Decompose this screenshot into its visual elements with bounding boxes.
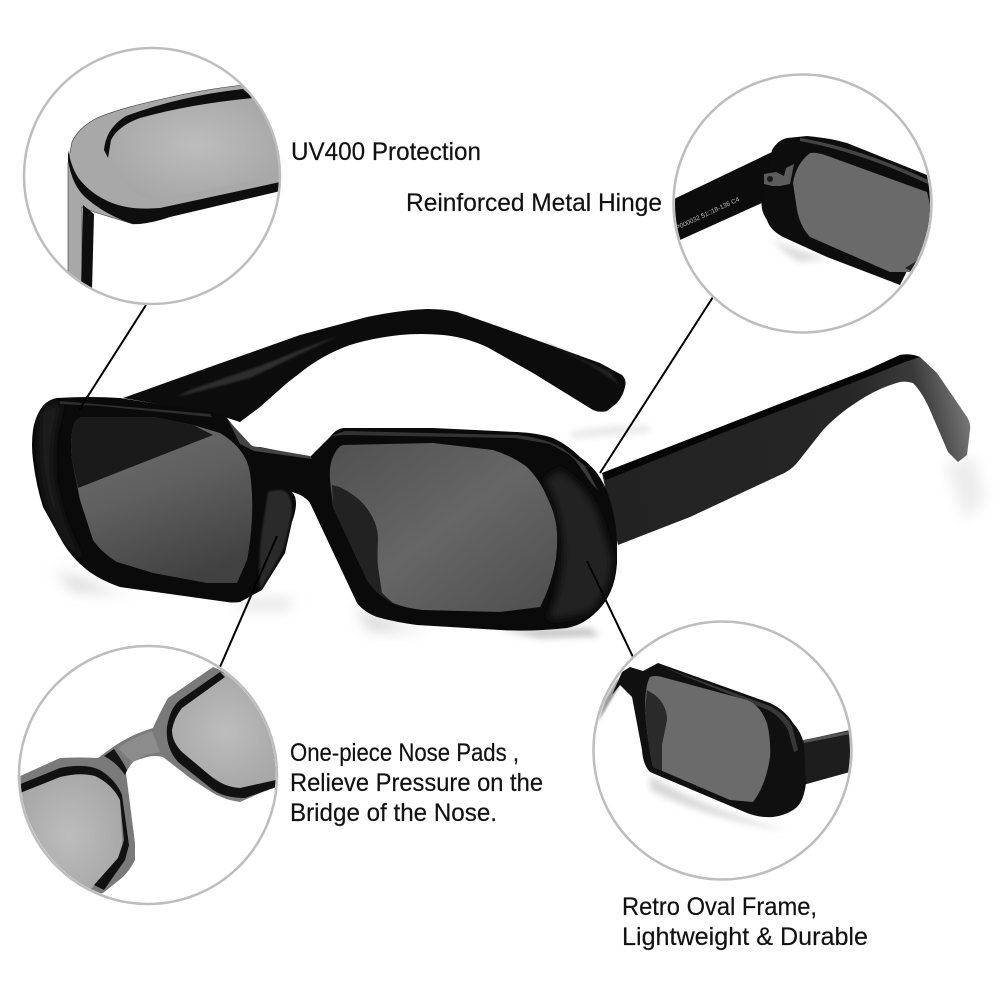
- hinge: [764, 164, 794, 186]
- label: UV400 Protection: UV400 Protection: [291, 138, 481, 166]
- front frame: [32, 397, 617, 631]
- left lens: [22, 774, 122, 888]
- grey far temple: [598, 678, 620, 722]
- lens dark crescent: [645, 690, 667, 771]
- label: retro oval frame: [622, 893, 868, 951]
- black vertical temple band: [81, 205, 94, 290]
- temple stub: [800, 730, 850, 785]
- leader line: nose pads: [220, 536, 277, 667]
- left lens black band: [18, 766, 129, 890]
- soft frame side tones: [39, 404, 612, 618]
- right lens dark crescent: [332, 485, 393, 603]
- label: nose pads: One-piece Nose Pads ,: [290, 739, 519, 767]
- left lens: [71, 417, 252, 583]
- detail circle: retro oval frame: [594, 622, 852, 880]
- temple top highlight: [803, 731, 850, 743]
- detail circle: nose pads: [15, 646, 285, 904]
- label: retro oval frame: Retro Oval Frame,: [622, 893, 817, 921]
- bridge dark crease: [104, 749, 127, 775]
- label: nose pads: Bridge of the Nose.: [290, 799, 497, 827]
- detail circle: metal hinge: [672, 74, 935, 332]
- near temple arm: [602, 354, 970, 545]
- far temple arm: [123, 309, 626, 422]
- ground shadows: [55, 426, 985, 638]
- inner temple: [672, 152, 772, 240]
- label: nose pads: Relieve Pressure on the: [290, 769, 543, 797]
- ground shadow: [648, 775, 772, 829]
- label: Reinforced Metal Hinge: Reinforced Metal Hinge: [406, 189, 662, 217]
- circle outline: [594, 622, 852, 880]
- temple engraving: P000032 51□18-136 C4: [675, 196, 741, 232]
- lens corner reflection: [905, 258, 918, 271]
- leader line: hinge: [600, 297, 713, 473]
- circle outline: [24, 48, 280, 304]
- circle outline: [674, 74, 932, 332]
- frame highlight: [660, 666, 798, 752]
- black band bottom: [68, 150, 285, 224]
- leader line: frame: [587, 561, 633, 657]
- right lens: [172, 673, 276, 788]
- label: nose pads: [290, 739, 543, 827]
- right lens: [330, 443, 557, 612]
- label: retro oval frame: Lightweight & Durable: [622, 923, 868, 951]
- near temple top edge band: [602, 354, 920, 480]
- left lens dark reflection: [71, 417, 213, 488]
- far temple highlight: [177, 335, 340, 397]
- black band top: [104, 89, 253, 158]
- detail circle: UV400 lens: [24, 48, 285, 304]
- lens: [645, 676, 770, 802]
- nose pad: [259, 490, 292, 590]
- top highlight: [800, 138, 928, 184]
- lens: [142, 111, 251, 180]
- frame highlights: [228, 420, 312, 459]
- lens: [793, 153, 935, 272]
- bridge highlight: [118, 731, 160, 762]
- frame rim grey: [68, 82, 285, 290]
- right lens black band: [167, 672, 285, 798]
- frame: [612, 663, 806, 817]
- frame: [15, 667, 285, 900]
- main sunglasses product photo: [32, 309, 985, 638]
- circle outline: [19, 646, 277, 904]
- frame back: [762, 136, 935, 285]
- soft shadow: [776, 241, 822, 264]
- leader line: UV400: [79, 305, 146, 410]
